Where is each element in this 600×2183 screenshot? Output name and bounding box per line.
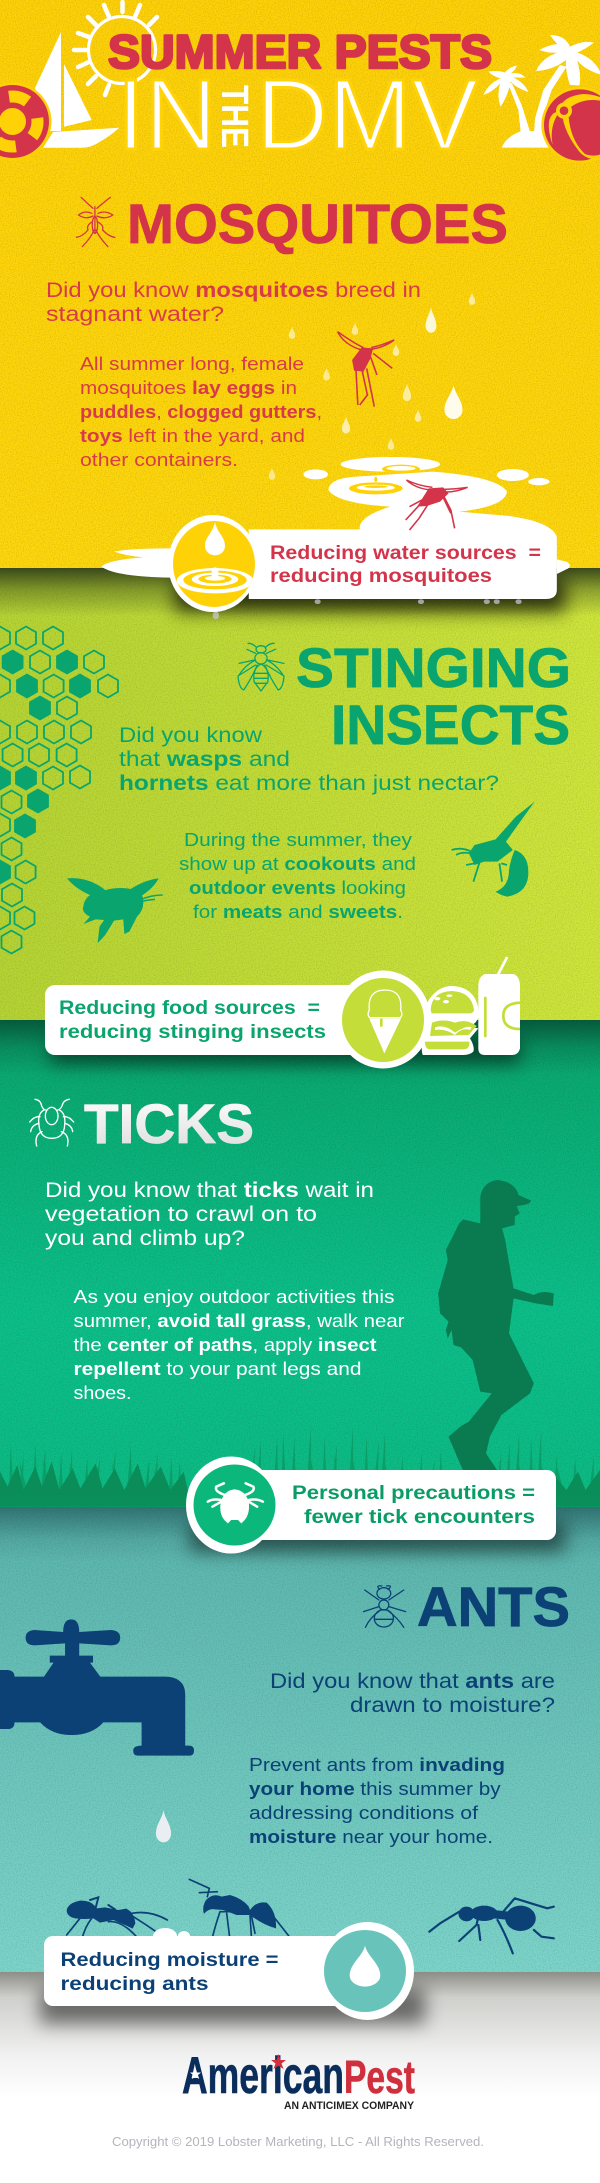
text: food callout: reducing stinging insects [59, 1022, 326, 1043]
heading: ants: ANTS [417, 1575, 570, 1638]
text: mosquito body: other containers. [80, 450, 238, 470]
callout: personal precautions [186, 1456, 565, 1554]
text: moisture callout: reducing ants [60, 1974, 208, 1995]
icon: water circle with ripple [168, 515, 258, 612]
callout box [44, 1928, 344, 2006]
icon: sun [74, 2, 157, 95]
icon: mosquito on puddle [406, 480, 468, 530]
text: tick body: summer, avoid tall grass , walk near [74, 1311, 404, 1331]
figure: hiker silhouette [438, 1180, 554, 1471]
icon: ant outline [364, 1586, 406, 1627]
text: ant question: drawn to moisture? [350, 1694, 555, 1717]
callout: moisture [40, 1922, 425, 2024]
text: tick question: vegetation to crawl on to [45, 1203, 317, 1226]
icon: beach ball [541, 87, 600, 163]
heading: stinging insects [296, 636, 571, 756]
text: stinging question: that wasps and [119, 748, 290, 771]
icon: ice cream circle [336, 970, 430, 1068]
copyright: Copyright © 2019 Lobster Marketing, LLC - All Rights Reserved. [112, 2134, 484, 2149]
text: water callout [270, 543, 541, 587]
text: water callout: Reducing water sources = [270, 543, 541, 564]
text: ant body [249, 1755, 505, 1847]
text: stinging body: for meats and sweets . [193, 902, 403, 922]
text: mosquito body [80, 354, 322, 470]
icon: wasp outline [238, 643, 284, 691]
text: ant question [270, 1670, 555, 1717]
panel: ants [0, 1575, 570, 2024]
icon: burger [422, 986, 479, 1055]
text: precautions callout: Personal precautions = [292, 1483, 535, 1504]
icon: tick outline [30, 1099, 74, 1146]
text: mosquito body: toys left in the yard, and [80, 426, 305, 446]
icon: flying mosquito silhouette [338, 332, 394, 407]
text: mosquito body: mosquitoes lay eggs in [80, 378, 297, 398]
text: tick question: you and climb up? [45, 1227, 245, 1250]
icon: water drops [269, 293, 475, 480]
callout box [45, 985, 375, 1055]
callout: food [45, 958, 520, 1068]
icon: drink cup [478, 958, 520, 1055]
text: precautions callout [292, 1483, 535, 1528]
text: stinging body: During the summer, they [184, 830, 412, 850]
title: in the DMV [117, 59, 479, 171]
text: food callout [59, 998, 326, 1043]
text: tick body [74, 1287, 404, 1403]
text: tick body: the center of paths , apply insect [74, 1335, 376, 1355]
icon: sailboat [35, 32, 119, 148]
text: mosquito question [46, 279, 421, 326]
text: moisture callout: Reducing moisture = [60, 1950, 278, 1971]
text: ant body: addressing conditions of [249, 1803, 479, 1823]
text: stinging question: Did you know [119, 724, 263, 747]
logo: American Pest [182, 2047, 415, 2112]
text: mosquito body: puddles , clogged gutters , [80, 402, 322, 422]
icon: ant middle [189, 1879, 291, 1941]
icon: faucet [0, 1619, 194, 1756]
text: tick body: As you enjoy outdoor activities this [74, 1287, 394, 1307]
callout box [250, 1470, 556, 1540]
grass [0, 1426, 600, 1507]
icon: ant right [429, 1898, 554, 1953]
icon: life ring [0, 82, 52, 160]
text: ant body: your home this summer by [249, 1779, 501, 1799]
puddle and callout: water [101, 457, 570, 619]
text: stinging body [179, 830, 416, 922]
title: in the DMV: DMV [256, 59, 479, 171]
panel: stinging insects [0, 626, 571, 1068]
title: in the DMV: IN [117, 59, 217, 171]
logo tagline: AN ANTICIMEX COMPANY [284, 2100, 415, 2112]
text: tick question: Did you know that ticks wait in [45, 1179, 374, 1202]
text: moisture callout [60, 1950, 278, 1995]
icon: mosquito outline [77, 197, 115, 247]
heading: ticks: TICKS [84, 1092, 254, 1155]
heading: stinging insects: STINGING [296, 636, 571, 699]
text: tick question [45, 1179, 374, 1250]
logo: American Pest: Pest [344, 2051, 415, 2103]
icon: ant left [67, 1897, 167, 1940]
icon: falling drop [156, 1810, 171, 1842]
icon: logo stars [190, 2054, 286, 2079]
heading: stinging insects: INSECTS [331, 693, 570, 756]
text: ant body: moisture near your home. [249, 1827, 493, 1847]
icon: wasp silhouette [452, 802, 535, 897]
title: in the DMV: THE [213, 85, 255, 148]
icon: palm trees [483, 35, 600, 148]
text: ant body: Prevent ants from invading [249, 1755, 505, 1775]
text: stinging question [119, 724, 499, 795]
text: mosquito body: All summer long, female [80, 354, 304, 374]
panel: ticks [0, 1092, 600, 1554]
title: summer pests: SUMMER PESTS [108, 25, 492, 78]
icon: moisture circle [321, 1922, 414, 2020]
header illustration and title [0, 2, 600, 171]
text: mosquito question: Did you know mosquitoes breed in [46, 279, 421, 302]
decorative honeycomb [0, 626, 118, 954]
panel: mosquitoes [46, 192, 570, 619]
text: water callout: reducing mosquitoes [270, 566, 492, 587]
text: tick body: shoes. [74, 1383, 132, 1403]
text: stinging question: hornets eat more than just nectar? [119, 772, 499, 795]
text: stinging body: outdoor events looking [189, 878, 406, 898]
text: food callout: Reducing food sources = [59, 998, 320, 1019]
text: stinging body: show up at cookouts and [179, 854, 416, 874]
text: ant question: Did you know that ants are [270, 1670, 555, 1693]
icon: tick circle [186, 1456, 276, 1554]
icon: bee silhouette [67, 878, 163, 943]
puddle shape [101, 457, 570, 619]
heading: mosquitoes: MOSQUITOES [127, 192, 508, 255]
text: precautions callout: fewer tick encounters [304, 1507, 535, 1528]
logo wordmark: American [182, 2047, 344, 2105]
text: tick body: repellent to your pant legs and [74, 1359, 362, 1379]
text: mosquito question: stagnant water? [46, 303, 224, 326]
